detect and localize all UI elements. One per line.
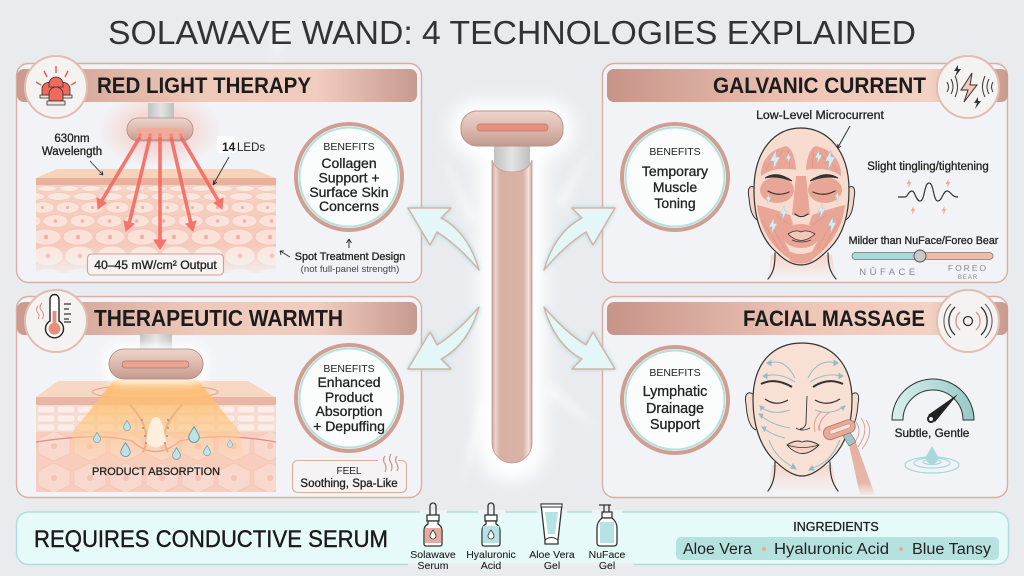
icon: vibration <box>937 290 999 352</box>
benefits circle: toning: BENEFITS <box>649 146 701 158</box>
icon: hyaluronic acid: Hyaluronic <box>466 549 516 561</box>
benefits circle: collagen <box>296 124 402 230</box>
ingredients <box>676 520 999 560</box>
benefits circle: collagen: BENEFITS <box>323 141 375 153</box>
arrow: to warmth panel <box>408 307 479 369</box>
label: wavelength: 630nm <box>54 133 90 145</box>
label: LED count <box>213 136 265 185</box>
icon: NuFace gel: Gel <box>599 560 615 572</box>
benefits circle: absorption: + Depuffing <box>313 418 385 434</box>
header bar: facial massage <box>607 302 1008 335</box>
icon: NuFace gel <box>589 505 626 572</box>
arrow: to red light panel <box>408 208 479 270</box>
header bar: red light therapy <box>17 69 417 102</box>
icon: Solawave serum: Solawave <box>410 549 456 561</box>
icon: red light bulbs <box>25 56 87 118</box>
ingredients: Hyaluronic Acid <box>774 541 889 558</box>
callout: feel <box>292 454 406 492</box>
arrows: lymph flow <box>759 360 845 470</box>
illustration: skin with warmth and absorption: PRODUCT ABSORPTION <box>92 466 220 478</box>
benefits circle: collagen: Surface Skin <box>309 184 389 200</box>
label: LED count: 14 <box>222 140 236 154</box>
header bar: facial massage: FACIAL MASSAGE <box>743 306 925 331</box>
label: tingling wave <box>867 161 989 215</box>
benefits circle: toning: Muscle <box>653 179 697 195</box>
slider: compared with NuFace and Foreo Bear: NŪFACE <box>859 267 919 278</box>
arrow: to massage panel <box>544 307 615 369</box>
icon: thermometer <box>25 290 87 352</box>
wand: glow <box>450 100 574 482</box>
benefits circle: toning: Temporary <box>642 163 708 179</box>
icon: Solawave serum <box>410 503 456 572</box>
benefits circle: absorption: Enhanced <box>317 374 381 390</box>
icon: hyaluronic acid <box>466 503 516 572</box>
benefits circle: drainage: Drainage <box>646 401 704 417</box>
benefits circle: absorption: Product <box>325 389 373 405</box>
gauge: subtle, gentle: Subtle, Gentle <box>895 426 970 440</box>
icon: aloe vera gel: Gel <box>544 560 560 572</box>
benefits circle: absorption: Absorption <box>316 403 382 419</box>
benefits circle: drainage <box>622 347 728 453</box>
label: microcurrent: Low-Level Microcurrent <box>756 108 884 122</box>
ingredients: Aloe Vera <box>683 541 752 558</box>
icon: wand on cheek <box>814 412 875 495</box>
header bar: therapeutic warmth <box>17 302 417 335</box>
label: microcurrent <box>756 108 884 149</box>
label: tingling wave: Slight tingling/tightening <box>867 161 989 173</box>
slider: compared with NuFace and Foreo Bear: BEAR <box>958 275 978 281</box>
gauge: subtle, gentle <box>892 379 974 440</box>
benefits circle: absorption <box>296 345 402 451</box>
icon: wand head <box>127 103 193 141</box>
label: wavelength <box>42 133 103 175</box>
label: LED count: LEDs <box>237 142 265 154</box>
arrows: red light rays <box>97 137 223 249</box>
illustration: skin cross-section with LED rays <box>36 92 276 273</box>
icon: lightning and waves <box>937 56 999 118</box>
benefits circle: absorption: BENEFITS <box>323 363 375 375</box>
header bar: galvanic current: GALVANIC CURRENT <box>713 73 927 98</box>
icon: NuFace gel: NuFace <box>589 549 626 561</box>
banner: requires conductive serum <box>16 503 1008 572</box>
callout: output <box>88 254 224 275</box>
illustration: face massage <box>745 343 875 495</box>
benefits circle: collagen: Collagen <box>321 155 377 171</box>
header bar: therapeutic warmth: THERAPEUTIC WARMTH <box>94 305 343 331</box>
panel: facial massage <box>602 290 1008 498</box>
callout: output: 40–45 mW/cm² Output <box>94 258 217 272</box>
benefits circle: drainage: Support <box>650 417 700 433</box>
benefits circle: toning: Toning <box>654 195 696 211</box>
benefits circle: collagen: Concerns <box>319 198 379 214</box>
panel: galvanic current <box>602 56 1008 282</box>
callout: feel: Soothing, Spa-Like <box>300 478 398 490</box>
arrow: to galvanic panel <box>544 208 615 270</box>
panel: red light therapy <box>16 56 422 282</box>
slider: compared with NuFace and Foreo Bear: FOREO <box>948 263 988 273</box>
icon: Solawave serum: Serum <box>418 560 449 572</box>
title: SOLAWAVE WAND: 4 TECHNOLOGIES EXPLAINED <box>108 14 916 51</box>
ingredients: Blue Tansy <box>912 541 991 558</box>
panel: therapeutic warmth <box>16 290 422 498</box>
benefits circle: drainage: BENEFITS <box>649 367 701 379</box>
callout: feel: FEEL <box>336 466 362 477</box>
icons: serum droplets <box>94 420 233 459</box>
banner: requires conductive serum: REQUIRES CONDUCTIVE SERUM <box>34 526 388 553</box>
illustration: face with muscles and current <box>748 128 855 280</box>
benefits circle: toning <box>622 124 728 230</box>
slider: compared with NuFace and Foreo Bear <box>849 235 999 281</box>
note: spot treatment <box>280 239 405 275</box>
benefits circle: collagen: Support + <box>318 170 380 186</box>
note: spot treatment: Spot Treatment Design <box>295 251 405 263</box>
icon: wand head warm <box>102 334 210 385</box>
note: spot treatment: (not full-panel strength) <box>301 264 399 275</box>
icon: aloe vera gel: Aloe Vera <box>529 549 575 561</box>
illustration: skin with warmth and absorption <box>36 334 276 492</box>
ingredients: INGREDIENTS <box>793 520 879 534</box>
header bar: red light therapy: RED LIGHT THERAPY <box>97 73 311 98</box>
header bar: galvanic current <box>607 69 1008 102</box>
benefits circle: drainage: Lymphatic <box>643 384 707 400</box>
icon: aloe vera gel <box>529 504 575 572</box>
icon: water ripple <box>905 446 959 473</box>
label: wavelength: Wavelength <box>42 146 102 158</box>
wand <box>461 111 563 463</box>
icon: hyaluronic acid: Acid <box>481 560 501 572</box>
slider: compared with NuFace and Foreo Bear: Milder than NuFace/Foreo Bear <box>849 235 999 247</box>
